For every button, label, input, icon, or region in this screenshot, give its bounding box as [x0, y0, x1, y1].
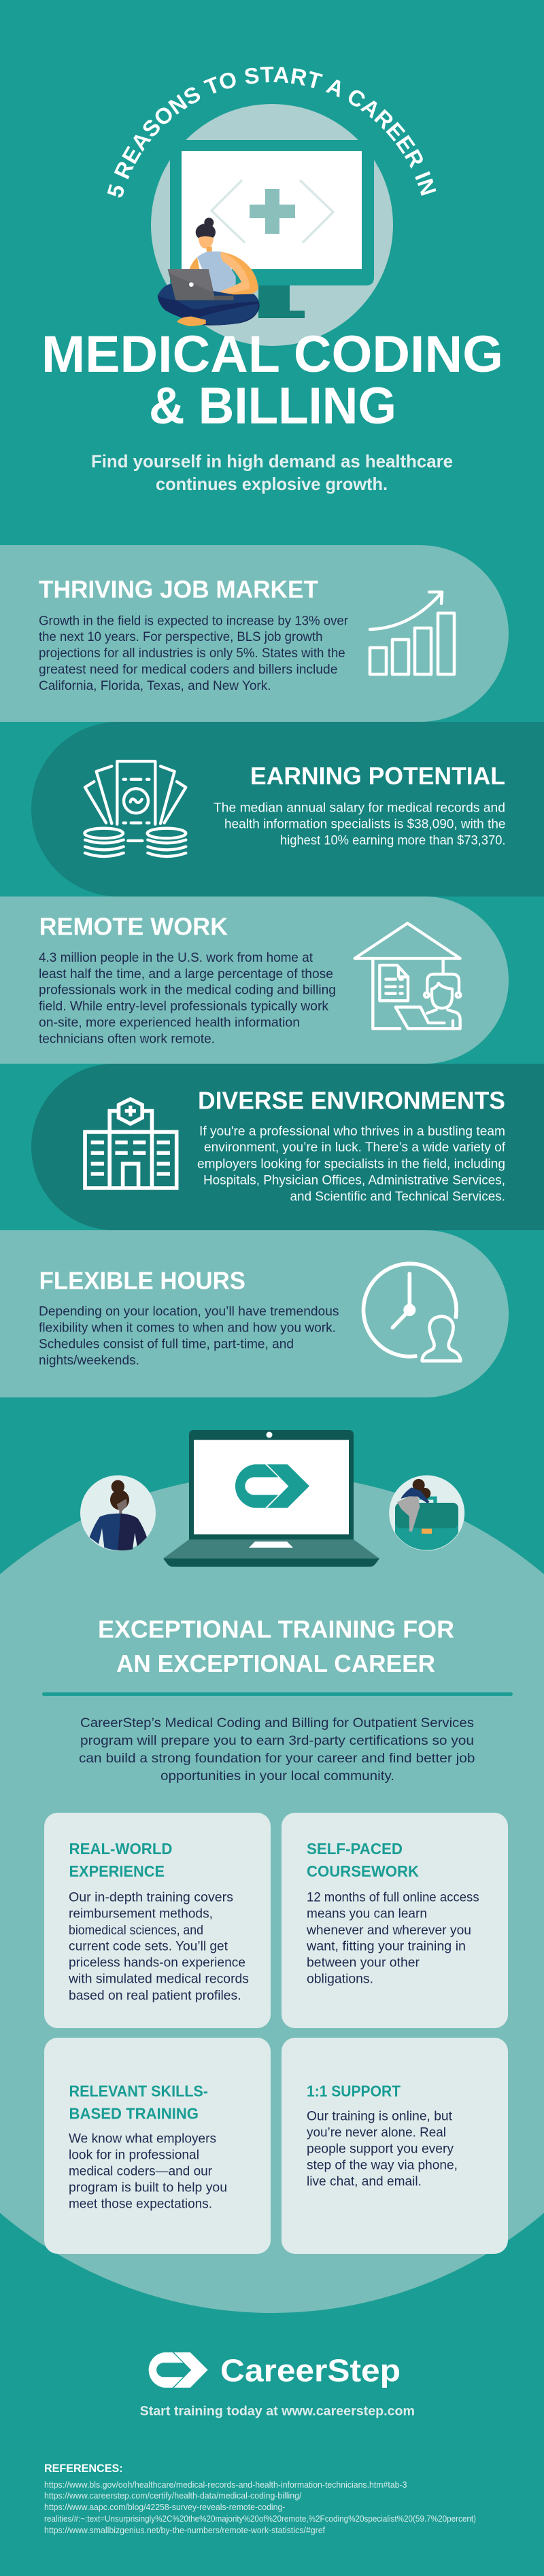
avatar: woman on briefcase [389, 1475, 464, 1551]
laptop screen [194, 1440, 349, 1534]
hero circle [151, 104, 393, 346]
card: 1:1 support [282, 2038, 508, 2254]
card heading: SELF-PACED [307, 1840, 403, 1858]
heading: exceptional training: EXCEPTIONAL TRAINING FOR [98, 1615, 454, 1643]
card: self-paced coursework [282, 1813, 508, 2028]
title [41, 326, 503, 435]
card text: means you can learn [307, 1906, 427, 1921]
laptop trackpad [249, 1542, 293, 1548]
laptop lip [163, 1559, 379, 1567]
curved heading: 5 REASONS TO START A CAREER IN [107, 67, 437, 197]
icon: code brackets [211, 180, 333, 243]
card text: reimbursement methods, [69, 1906, 213, 1921]
card text: with simulated medical records [68, 1971, 249, 1986]
heading: EARNING POTENTIAL [250, 762, 505, 790]
card text: based on real patient profiles. [69, 1988, 241, 2003]
body text: field. While entry-level professionals typically work [39, 999, 328, 1014]
body text [39, 950, 336, 1047]
body text: nights/weekends. [39, 1353, 139, 1368]
heading: exceptional training: AN EXCEPTIONAL CAREER [116, 1650, 435, 1677]
woman with laptop [158, 217, 260, 326]
card text: program is built to help you [69, 2180, 227, 2195]
icon: careerstep logo mark [235, 1464, 309, 1508]
card text [68, 1890, 249, 2003]
card text: want, fitting your training in [306, 1939, 466, 1954]
body text: highest 10% earning more than $73,370. [280, 833, 506, 848]
card text: priceless hands-on experience [69, 1955, 245, 1970]
subtitle [91, 451, 453, 494]
card text: Our training is online, but [307, 2108, 453, 2123]
avatar: woman portrait [80, 1475, 156, 1551]
large training background circle [0, 1474, 544, 2313]
laptop base [163, 1539, 379, 1559]
monitor frame [170, 140, 374, 285]
body text: employers looking for specialists in the field, including [197, 1157, 505, 1172]
reference links: https://www.careerstep.com/certify/health-data/medical-coding-billing/ [44, 2491, 302, 2501]
card text: Our in-depth training covers [69, 1890, 233, 1904]
icon: home office [355, 923, 460, 1028]
intro paragraph: can build a strong foundation for your career and find better job [79, 1751, 475, 1766]
icon: money and coins [84, 761, 186, 856]
card text: you’re never alone. Real [307, 2125, 446, 2140]
card text: 12 months of full online access [307, 1890, 479, 1904]
card: real-world experience [44, 1813, 271, 2028]
title: & BILLING [149, 377, 396, 435]
body text: the next 10 years. For perspective, BLS job growth [39, 629, 322, 644]
references [44, 2462, 476, 2535]
subtitle: Find yourself in high demand as healthcare [91, 451, 453, 472]
card text: meet those expectations. [69, 2197, 212, 2212]
body text: flexibility when it comes to when and how you work. [39, 1320, 336, 1335]
reference links: https://www.smallbizgenius.net/by-the-numbers/remote-work-statistics/#gref [44, 2526, 326, 2535]
intro paragraph: program will prepare you to earn 3rd-party certifications so you [80, 1733, 474, 1748]
logo wordmark: CareerStep [220, 2353, 401, 2388]
intro paragraph: opportunities in your local community. [160, 1769, 394, 1783]
card text [69, 2131, 227, 2212]
hero illustration [151, 104, 393, 346]
body text: Schedules consist of full time, part-time, and [39, 1336, 294, 1351]
card heading: REAL-WORLD [69, 1840, 173, 1858]
card text [306, 1890, 479, 1986]
title: MEDICAL CODING [41, 326, 503, 383]
references heading: REFERENCES: [44, 2462, 123, 2475]
icon: clock with person [363, 1264, 460, 1361]
heading: REMOTE WORK [39, 912, 228, 941]
body text [214, 800, 506, 848]
laptop camera [267, 1431, 272, 1438]
body text: California, Florida, Texas, and New York. [39, 678, 271, 693]
heading: DIVERSE ENVIRONMENTS [198, 1086, 505, 1115]
body text [39, 613, 348, 693]
card text: step of the way via phone, [307, 2158, 458, 2173]
icon: logo mark [149, 2352, 208, 2388]
panel: thriving job market [0, 545, 509, 722]
call to action: Start training today at www.careerstep.com [140, 2405, 415, 2418]
card text: people support you every [307, 2141, 454, 2156]
card heading: 1:1 SUPPORT [307, 2083, 401, 2100]
reference links [44, 2480, 476, 2535]
body text: technicians often work remote. [39, 1032, 215, 1047]
body text: professionals work in the medical coding and billing [39, 983, 336, 998]
body text: and Scientific and Technical Services. [290, 1189, 505, 1204]
icon: medical cross [250, 189, 295, 234]
card heading: EXPERIENCE [69, 1862, 165, 1880]
monitor screen [182, 151, 362, 269]
body text: least half the time, and a large percentage of those [39, 967, 333, 981]
card text [307, 2108, 458, 2189]
panel: diverse environments [31, 1064, 544, 1230]
footer logo [149, 2352, 401, 2388]
body text: The median annual salary for medical records and [214, 800, 505, 815]
card text: biomedical sciences, and [69, 1923, 203, 1938]
card text: We know what employers [69, 2131, 216, 2146]
card text: current code sets. You’ll get [69, 1939, 228, 1954]
heading: THRIVING JOB MARKET [39, 575, 318, 604]
body text: environment, you’re in luck. There’s a wide variety of [204, 1140, 506, 1155]
heading: exceptional training [98, 1615, 454, 1677]
body text [39, 1304, 339, 1368]
intro paragraph [79, 1716, 475, 1783]
card heading [69, 1840, 173, 1880]
monitor stand [258, 285, 305, 318]
card text: whenever and wherever you [306, 1923, 471, 1938]
panel: earning potential [31, 722, 544, 897]
body text: on-site, more experienced health information [39, 1015, 300, 1030]
card heading: BASED TRAINING [69, 2104, 199, 2122]
icon: hospital [85, 1099, 177, 1188]
body text: If you're a professional who thrives in a bustling team [199, 1124, 505, 1138]
body text: greatest need for medical coders and billers include [39, 662, 337, 677]
card heading [307, 1840, 419, 1880]
subtitle: continues explosive growth. [156, 474, 388, 494]
card text: obligations. [307, 1971, 373, 1986]
card heading: RELEVANT SKILLS- [69, 2083, 208, 2100]
card text: live chat, and email. [307, 2174, 422, 2189]
intro paragraph: CareerStep’s Medical Coding and Billing for Outpatient Services [80, 1716, 474, 1730]
body text: projections for all industries is only 5%. States with the [39, 646, 345, 661]
card text: look for in professional [69, 2148, 199, 2163]
card: relevant skills-based training [44, 2038, 271, 2254]
card text: medical coders—and our [69, 2164, 212, 2179]
card heading [69, 2083, 208, 2122]
body text: Depending on your location, you’ll have tremendous [39, 1304, 339, 1319]
panel: remote work [0, 897, 509, 1064]
reference links: https://www.aapc.com/blog/42258-survey-reveals-remote-coding- [44, 2503, 285, 2512]
body text: Growth in the field is expected to increase by 13% over [39, 613, 348, 628]
card text: between your other [307, 1955, 420, 1970]
laptop illustration [163, 1430, 379, 1567]
icon: rising bar chart [370, 592, 454, 674]
panel: flexible hours [0, 1230, 509, 1397]
body text: 4.3 million people in the U.S. work from home at [39, 950, 313, 965]
reference links: https://www.bls.gov/ooh/healthcare/medical-records-and-health-information-technicians.htm#tab-3 [44, 2480, 407, 2490]
card heading: COURSEWORK [307, 1862, 419, 1880]
body text: health information specialists is $38,090, with the [224, 816, 506, 831]
body text [197, 1124, 506, 1204]
heading: FLEXIBLE HOURS [39, 1267, 245, 1295]
reference links: realities/#:~:text=Unsurprisingly%2C%20the%20majority%20of%20remote,%2Fcoding%20specialist%20(59.7%20percent) [44, 2514, 476, 2524]
body text: Hospitals, Physician Offices, Administrative Services, [203, 1173, 505, 1188]
laptop lid [189, 1430, 354, 1539]
